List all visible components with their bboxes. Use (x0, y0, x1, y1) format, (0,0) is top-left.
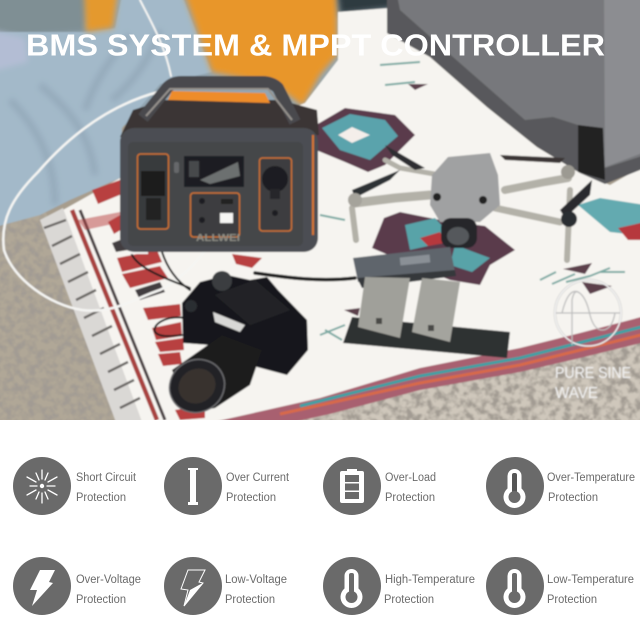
protection: low temperature (486, 557, 634, 615)
drone body (430, 153, 500, 222)
white usb adapter (129, 250, 150, 256)
orange edge (312, 135, 314, 235)
left AC outlet panel (138, 154, 168, 229)
blanket red pattern (78, 180, 262, 420)
pure sine wave text: WAVE (555, 385, 598, 402)
orange clothing (84, 0, 337, 106)
black cables (130, 250, 358, 338)
camera body (182, 275, 308, 375)
right car socket panel (260, 158, 292, 231)
crate grey panel (397, 0, 640, 180)
station top (120, 100, 319, 137)
protection: low voltage: Protection (225, 594, 275, 606)
protection: over voltage: Protection (76, 594, 126, 606)
title: BMS SYSTEM & MPPT CONTROLLER (26, 28, 605, 62)
drone charger (353, 247, 456, 288)
protection: high temperature: Protection (384, 594, 434, 606)
protection: high temperature (323, 557, 475, 615)
power station (120, 82, 319, 252)
blue sweater (0, 0, 212, 227)
gravel ground right (300, 342, 640, 420)
drone (348, 145, 592, 260)
pure sine wave badge (555, 280, 621, 346)
protection: over current (164, 457, 290, 515)
protection: short circuit: Short Circuit (76, 472, 137, 484)
dark background strip (337, 0, 395, 14)
colourful blanket bottom fringe (200, 316, 640, 425)
drone propellers (348, 145, 592, 227)
blanket dark pattern (112, 238, 165, 300)
blanket body (63, 8, 640, 425)
protection: low temperature: Protection (547, 594, 597, 606)
protection: low voltage (164, 557, 287, 615)
battery charging hub (343, 317, 510, 358)
brand logo: ALLWEI (196, 233, 240, 244)
crate dark base (387, 0, 640, 184)
protection: over temperature: Over-Temperature (547, 472, 635, 484)
lower central diamond pattern (372, 212, 515, 285)
display screen (174, 156, 244, 187)
blanket fringe left (40, 208, 143, 425)
arrow pattern motifs (320, 62, 625, 340)
drone arms (352, 160, 570, 260)
grey background top left (0, 0, 86, 32)
station front panel (128, 142, 303, 246)
drone gimbal camera (441, 218, 477, 248)
drone battery left (358, 277, 410, 338)
protection: over load (323, 457, 436, 515)
pure sine wave badge shadow (555, 280, 621, 346)
right teal pattern (578, 198, 640, 240)
gravel ground left (0, 214, 116, 420)
protection: high temperature: High-Temperature (385, 574, 475, 586)
protection: over voltage: Over-Voltage (76, 574, 141, 586)
protection: low voltage: Low-Voltage (225, 574, 287, 586)
usb plug white (220, 213, 233, 223)
top backdrop (75, 0, 386, 126)
pure sine wave text (555, 365, 631, 402)
station handle (143, 82, 295, 122)
teal pattern upper diamond (316, 108, 415, 172)
protection: over current: Over Current (226, 472, 290, 484)
protection: over load: Over-Load (385, 472, 436, 484)
pure sine wave text: PURE SINE (555, 365, 631, 382)
protection: short circuit (13, 457, 137, 515)
photo: power station outdoor scene (0, 0, 640, 425)
camera lens (172, 335, 262, 412)
dark triangles on blanket (344, 84, 612, 316)
protection: over voltage (13, 557, 141, 615)
protection: over temperature (486, 457, 635, 515)
protection: short circuit: Protection (76, 492, 126, 504)
protection: over load: Protection (385, 492, 435, 504)
white usb cables (1, 0, 173, 313)
protection: over temperature: Protection (548, 492, 598, 504)
center dc panel (190, 193, 240, 237)
protection: low temperature: Low-Temperature (547, 574, 634, 586)
camera (160, 271, 308, 423)
drone battery right (412, 278, 460, 342)
blanket border stripes (72, 210, 165, 420)
protection: over current: Protection (226, 492, 276, 504)
station body (120, 128, 318, 252)
